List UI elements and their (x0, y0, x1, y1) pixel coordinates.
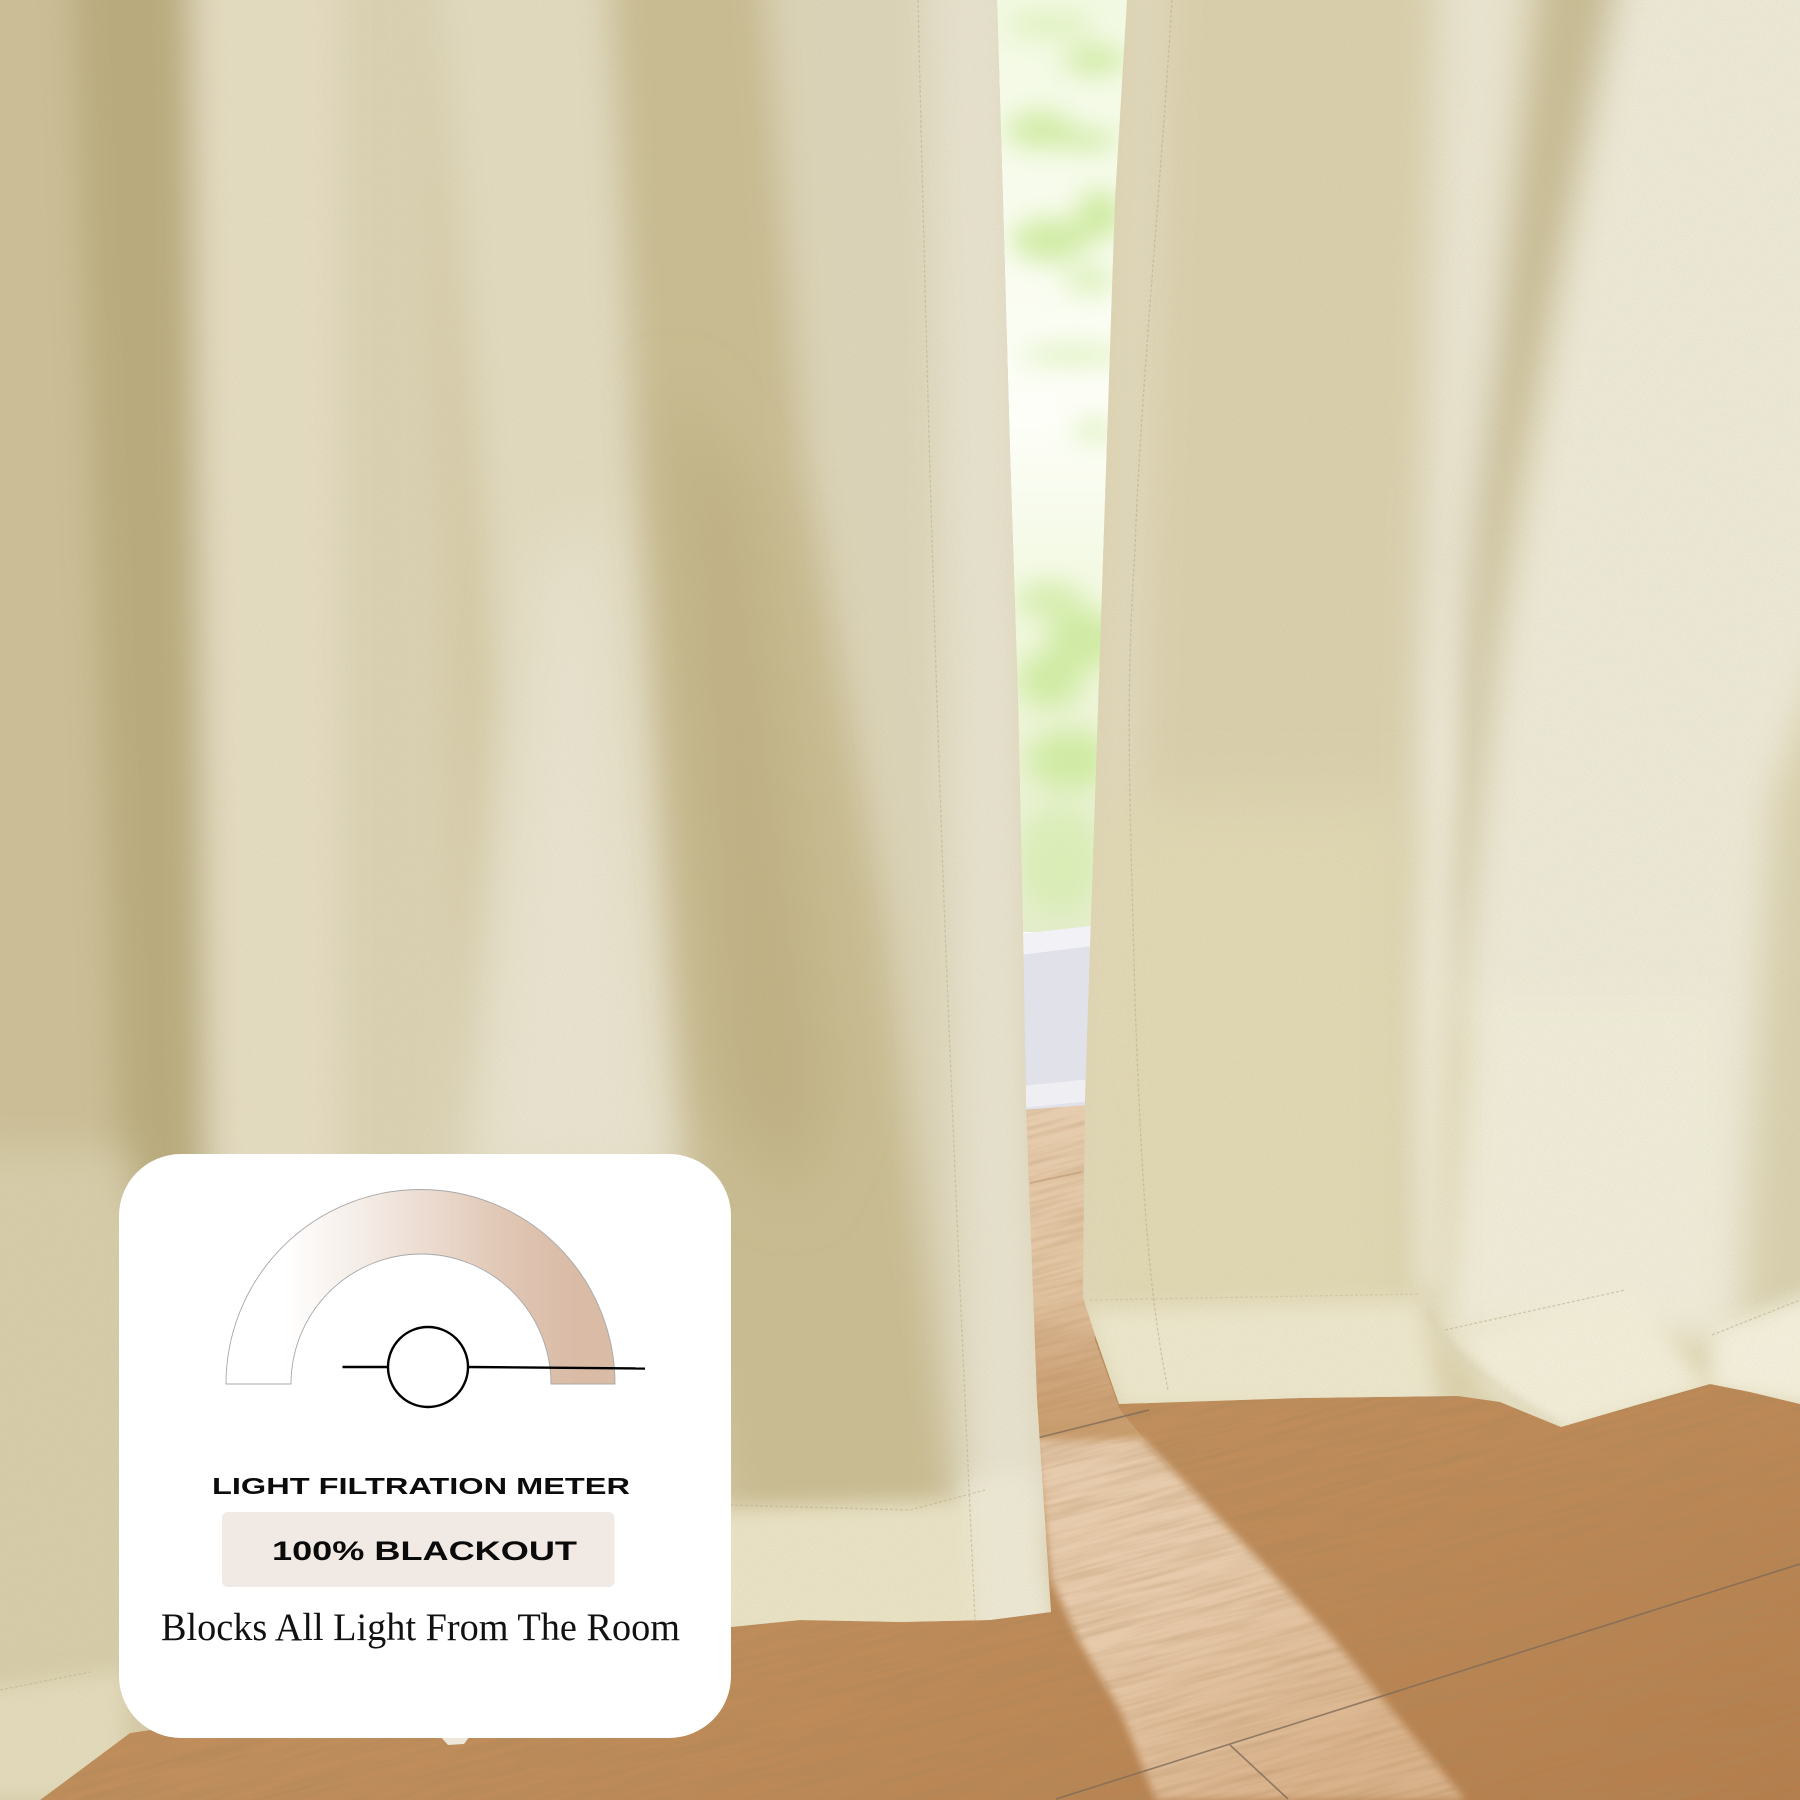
blackout rating badge (222, 1512, 614, 1587)
soft lit and shaded fold areas (470, 520, 670, 1180)
blackout rating badge: 100% BLACKOUT (272, 1536, 577, 1566)
wood floor (0, 1095, 1800, 1800)
plank seams (1030, 1172, 1800, 1799)
light filtration meter card (119, 1154, 731, 1738)
grain over the lit floor (1020, 1100, 1465, 1800)
semicircular meter gauge (226, 1190, 645, 1407)
curtain fringe peeking below the card (440, 1736, 470, 1745)
sunlight beam on the floor (1035, 1439, 1465, 1800)
meter description: Blocks All Light From The Room (161, 1606, 680, 1649)
right curtain hem (1083, 1290, 1800, 1435)
right curtain (1060, 0, 1800, 1440)
bright fold ridge (1420, 560, 1452, 1290)
left curtain hem (0, 1470, 1060, 1800)
light strip on the floor between curtains (1020, 1100, 1145, 1445)
window sill and wall trim (1020, 925, 1100, 1110)
meter heading: LIGHT FILTRATION METER (212, 1473, 630, 1499)
left curtain (0, 0, 1060, 1800)
window view with foliage (997, 0, 1127, 932)
